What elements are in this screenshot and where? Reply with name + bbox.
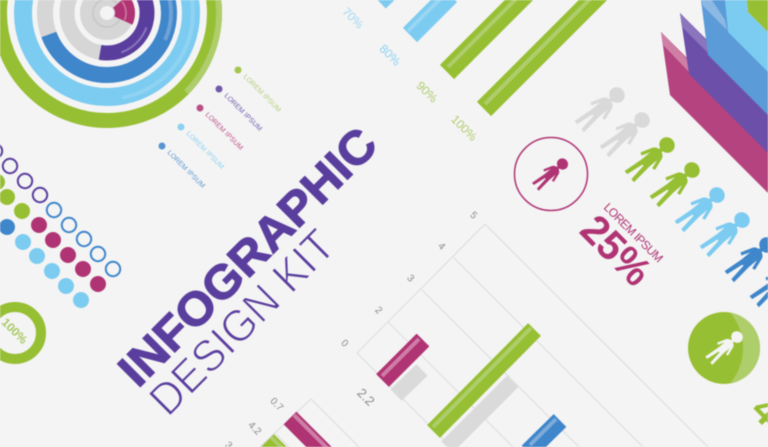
legend: LOREM IPSUM bbox=[185, 130, 225, 171]
chart axis labels: 4 bbox=[435, 241, 447, 253]
donut: 100% bbox=[0, 307, 41, 359]
dot matrix bbox=[0, 144, 120, 308]
chart axis labels: 3 bbox=[404, 273, 416, 285]
legend: LOREM IPSUM bbox=[166, 149, 206, 190]
percent labels: 100% bbox=[448, 112, 480, 144]
chart axis labels: 0 bbox=[338, 338, 350, 350]
chart axis labels: 5 bbox=[467, 210, 479, 222]
green person badge bbox=[688, 312, 760, 384]
legend bbox=[158, 66, 282, 190]
light blue people bbox=[672, 182, 755, 260]
percent labels: 80% bbox=[377, 42, 404, 69]
chart axis labels bbox=[338, 210, 479, 409]
chart bars bbox=[382, 328, 560, 447]
green people bbox=[622, 132, 705, 210]
circled pink person bbox=[514, 138, 588, 210]
concentric ring chart bbox=[0, 0, 260, 166]
percent labels: 70% bbox=[340, 5, 367, 32]
secondary bar chart: 4.2 bbox=[245, 420, 263, 438]
dark blue people bbox=[722, 232, 768, 310]
top progress bars bbox=[380, 0, 604, 109]
main bar chart bbox=[338, 210, 708, 447]
25% stat: LOREM IPSUM bbox=[601, 200, 666, 265]
title: INFOGRAPHIC bbox=[108, 117, 387, 396]
chart axis labels: 2 bbox=[372, 305, 384, 317]
chart axis labels: 2.2 bbox=[354, 385, 378, 409]
legend: LOREM IPSUM bbox=[223, 92, 263, 133]
25% stat: 25% bbox=[572, 206, 661, 295]
grey people bbox=[572, 82, 655, 160]
percent labels: 90% bbox=[414, 79, 441, 106]
legend: LOREM IPSUM bbox=[242, 73, 282, 114]
secondary bar chart: 0.7 bbox=[267, 396, 285, 414]
layered ribbons bbox=[661, 0, 768, 193]
legend: LOREM IPSUM bbox=[204, 111, 244, 152]
percent labels bbox=[340, 5, 480, 144]
secondary bar chart bbox=[222, 396, 359, 447]
title: DESIGN KIT bbox=[139, 219, 345, 425]
